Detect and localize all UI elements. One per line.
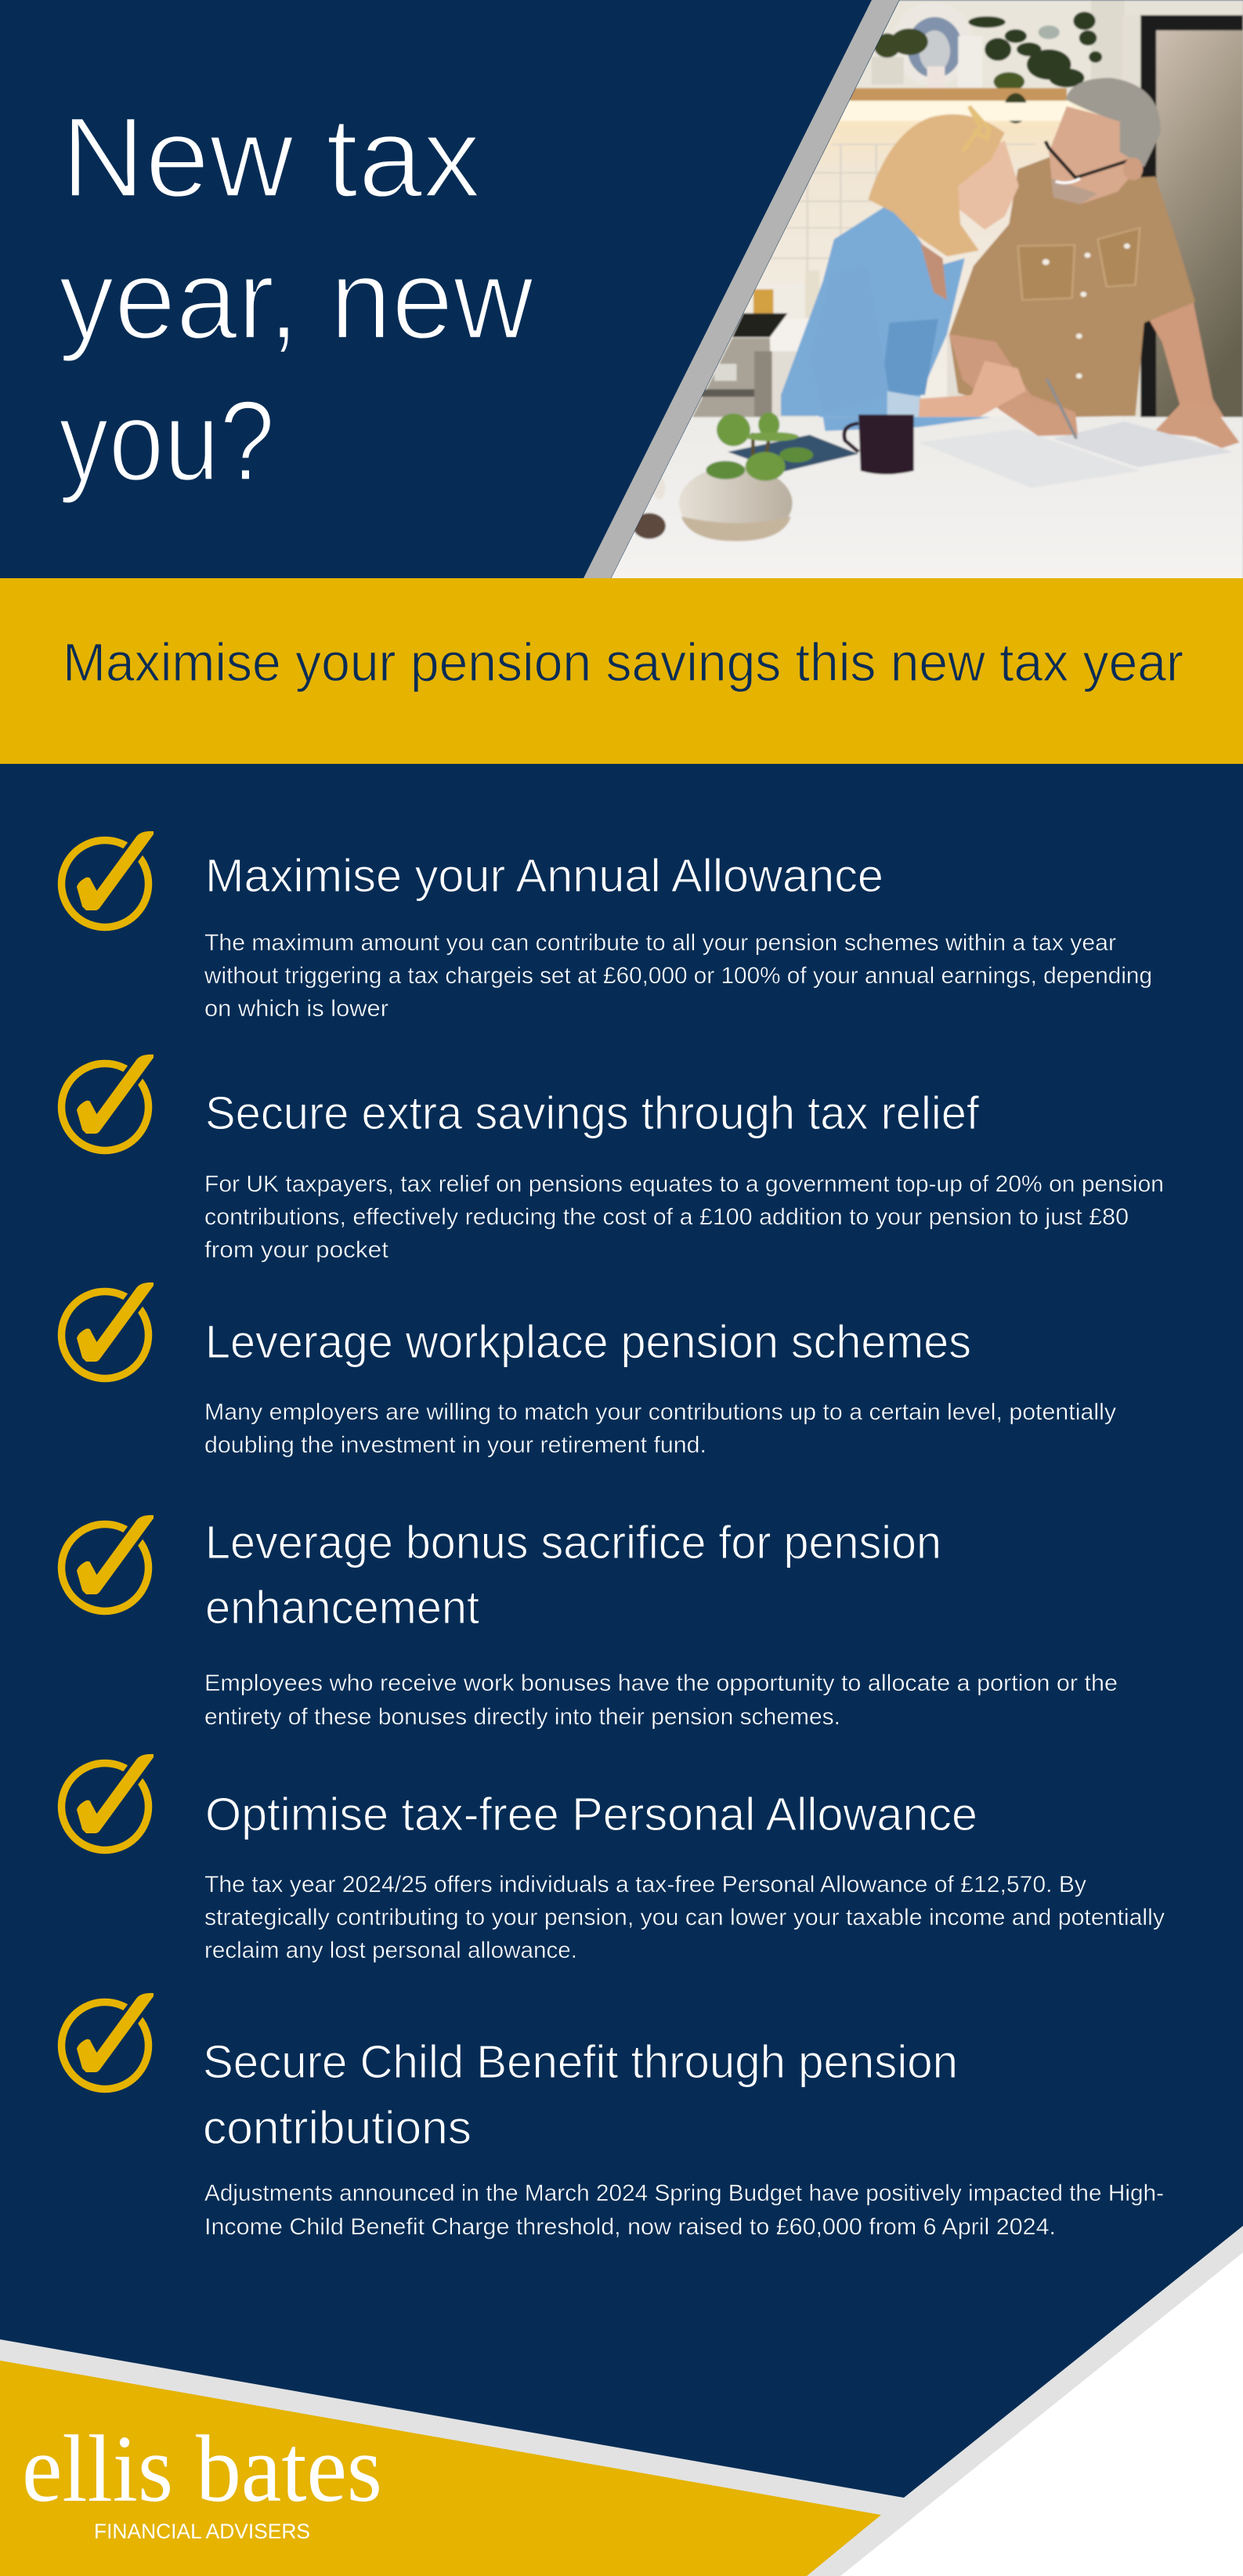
sub: man's head [1048,106,1130,204]
item 1: Maximise your Annual Allowance: The maximum amount you can contribute to all your pension schemes within a tax year [204,930,1116,956]
item 1: Maximise your Annual Allowance [61,831,1152,1022]
sub: plant pot [678,466,793,524]
check icon [61,831,154,928]
item 6: Secure Child Benefit through pension contributions: Adjustments announced in the March 2024 Spring Budget have positively impacted the High- [204,2180,1164,2206]
item 1: Maximise your Annual Allowance: on which is lower [204,996,388,1022]
sub: woman's neck [920,243,947,300]
item 2: Secure extra savings through tax relief: from your pocket [204,1237,388,1263]
logo: ellis bates [22,2416,382,2522]
sub: shelf plate [892,2,974,85]
item 3: Leverage workplace pension schemes: Leverage workplace pension schemes [205,1316,971,1368]
item 4: Leverage bonus sacrifice for pension enhancement: enhancement [205,1582,479,1634]
item 2: Secure extra savings through tax relief [61,1055,1164,1263]
item 5: Optimise tax-free Personal Allowance: The tax year 2024/25 offers individuals a tax-free Personal Allowance of £12,570. By [204,1872,1086,1898]
item 5: Optimise tax-free Personal Allowance: strategically contributing to your pension, you can lower your taxable income and potentially [204,1905,1165,1930]
item 5: Optimise tax-free Personal Allowance: Optimise tax-free Personal Allowance [205,1789,977,1840]
item 3: Leverage workplace pension schemes: doubling the investment in your retirement fund. [204,1432,706,1458]
title: year, new [59,235,534,363]
item 3: Leverage workplace pension schemes: Many employers are willing to match your contributions up to a certain level, potentially [204,1399,1116,1425]
item 6: Secure Child Benefit through pension contributions: contributions [203,2102,472,2154]
sub: man's forearm [1148,302,1225,418]
title: you? [59,377,275,505]
header photo: couple at kitchen counter [593,0,1243,581]
subtitle band: Maximise your pension savings this new tax year [63,632,1183,693]
check icon [61,1283,154,1379]
sub: man's shirt [949,156,1195,418]
check icon [61,1754,154,1851]
footer yellow panel [0,2361,881,2576]
logo: FINANCIAL ADVISERS [94,2520,310,2543]
sub: tablet [728,435,858,472]
item 6: Secure Child Benefit through pension contributions: Income Child Benefit Charge threshold, now raised to £60,000 from 6 April 2024. [204,2214,1056,2240]
item 1: Maximise your Annual Allowance: Maximise your Annual Allowance [205,850,883,902]
item 3: Leverage workplace pension schemes [61,1283,1116,1458]
sub: woman's denim shirt [781,205,965,431]
item 2: Secure extra savings through tax relief: contributions, effectively reducing the cost of a £100 addition to your pension to just £80 [204,1204,1129,1230]
check icon [61,1515,154,1611]
item 6: Secure Child Benefit through pension contributions: Secure Child Benefit through pension [203,2036,958,2088]
item 2: Secure extra savings through tax relief: For UK taxpayers, tax relief on pensions equates to a government top-up of 20% on pension [204,1171,1164,1197]
item 5: Optimise tax-free Personal Allowance [61,1754,1165,1963]
check icon [61,1993,154,2089]
sub: papers [918,429,1140,488]
item 4: Leverage bonus sacrifice for pension enhancement: entirety of these bonuses directly into their pension schemes. [204,1704,840,1730]
sub: woman's arm and hand [918,360,1026,418]
sub: mug [858,414,914,474]
sub: stones [633,513,666,539]
sub: kitchen units [771,320,808,350]
footer white corner [840,2252,1243,2576]
check icon [61,1055,154,1150]
item 4: Leverage bonus sacrifice for pension enhancement [61,1515,1118,1730]
item 6: Secure Child Benefit through pension contributions [61,1993,1164,2240]
item 5: Optimise tax-free Personal Allowance: reclaim any lost personal allowance. [204,1937,577,1963]
footer light grey band [0,2226,1243,2576]
header grey diagonal stripe [584,0,899,578]
sub: shelf plant [968,12,1102,91]
item 4: Leverage bonus sacrifice for pension enhancement: Leverage bonus sacrifice for pension [205,1517,941,1568]
sub: woman's head and hair [954,140,1019,230]
title: New tax [61,93,481,221]
title [59,93,534,505]
sub: man's right arm [949,334,1076,414]
item 2: Secure extra savings through tax relief: Secure extra savings through tax relief [205,1087,980,1139]
subtitle band [0,578,1243,764]
item 1: Maximise your Annual Allowance: without triggering a tax chargeis set at £60,000 or 100% of your annual earnings, depending [204,963,1152,989]
sub: counter top [593,417,1243,581]
item 4: Leverage bonus sacrifice for pension enhancement: Employees who receive work bonuses have the opportunity to allocate a portion or the [204,1670,1118,1696]
sub: plant leaves [753,433,770,467]
